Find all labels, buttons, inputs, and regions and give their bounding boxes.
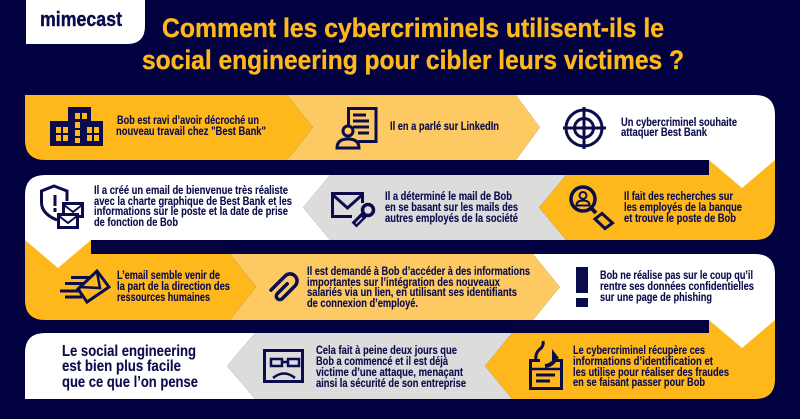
text: step 6: avec la charte graphique de Best Bank et les [94,196,292,208]
icon: shield and envelopes [42,186,82,228]
text: step 10: informations d’identification et [573,356,713,368]
text: step 5 [385,191,518,225]
panel: row 3 step 8 [230,254,560,320]
text: step 8: de connexion d’employé. [307,298,418,310]
text: step 6: Il a créé un email de bienvenue très réaliste [94,185,288,197]
text: step 1: nouveau travail chez "Best Bank" [116,126,266,138]
text: step 6: de fonction de Bob [94,217,178,229]
text: step 3 [621,117,737,139]
text: step 9: sur une page de phishing [600,292,712,304]
text: step 3: Un cybercriminel souhaite [621,117,737,129]
text: step 7: ressources humaines [117,292,210,304]
text: step 8 [307,266,530,310]
icon: paperclip [270,271,300,301]
text: step 11 [316,345,466,390]
panel: row 2 step 6 [25,175,330,268]
text: step 3: attaquer Best Bank [621,127,707,139]
text: step 11: ainsi la sécurité de son entreprise [316,378,466,390]
title [142,13,684,75]
text: step 6: informations sur le poste et la date de prise [94,206,288,218]
text: step 1: Bob est ravi d’avoir décroché un [117,115,259,127]
logo: mimecast: mimecast [40,9,122,31]
text: step 10 [573,345,729,389]
text: step 4: et trouve le poste de Bob [624,213,736,225]
icon: office buildings [50,107,103,146]
text: conclusion [62,343,198,391]
text: step 5: autres employés de la société [385,213,518,225]
text: step 7 [117,270,230,304]
text: step 4: Il fait des recherches sur [624,191,733,203]
text: conclusion: est bien plus facile [62,358,181,375]
text: conclusion: que ce que l’on pense [62,374,198,391]
panel: row 2 step 4 [539,160,775,240]
icon: envelope with key [332,194,374,225]
text: step 10: Le cybercriminel récupère ces [573,345,705,357]
text: step 4 [624,191,742,225]
icon: phishing hook and form [530,341,562,388]
text: step 10: les utilise pour réaliser des fraudes [573,367,729,379]
text: step 11: victime d’une attaque, menaçant [316,367,463,379]
panel: row 4 conclusion [25,333,255,399]
logo: mimecast [26,0,145,44]
icon: exclamation mark [576,267,588,307]
text: step 9: rentre ses données confidentielles [600,281,754,293]
text: step 8: salariés via un lien, en utilisant ses identifiants [307,287,517,299]
text: step 8: importantes sur l’intégration des nouveaux [307,277,500,289]
text: step 1 [116,115,266,138]
title: Comment les cybercriminels utilisent-ils le [162,13,664,43]
text: step 5: Il a déterminé le mail de Bob [385,191,512,203]
text: step 7: la part de la direction des [117,281,230,293]
icon: profile document [337,108,376,148]
text: step 9: Bob ne réalise pas sur le coup qu’il [600,270,753,282]
text: step 6 [94,185,292,229]
panel: row 4 step 11 [227,333,512,399]
text: step 11: Bob a commencé et il est déjà [316,356,448,368]
text: step 2: Il en a parlé sur LinkedIn [390,121,499,133]
icon: target [563,107,606,149]
panel: row 3 step 7 [25,240,256,320]
title: social engineering pour cibler leurs victimes ? [142,45,684,75]
text: step 11: Cela fait à peine deux jours que [316,345,457,357]
text: step 7: L’email semble venir de [117,270,220,282]
text: step 8: Il est demandé à Bob d’accéder à des informations [307,266,530,278]
text: conclusion: Le social engineering [62,343,196,360]
text: step 10: en se faisant passer pour Bob [573,377,705,389]
icon: sad face screen [264,350,302,382]
panel: row 1 step 1 [25,95,313,160]
icon: speeding envelope [60,271,109,302]
text: step 5: en se basant sur les mails des [385,202,518,214]
panel: row 3 step 9 [533,254,775,348]
panel: row 2 step 5 [303,175,566,240]
panel: row 1 step 3 [516,95,775,188]
panel: row 1 step 2 [287,95,540,160]
panel: row 4 step 10 [485,320,775,399]
icon: magnifier on person [571,187,612,228]
text: step 4: les employés de la banque [624,202,742,214]
text: step 9 [600,270,754,304]
